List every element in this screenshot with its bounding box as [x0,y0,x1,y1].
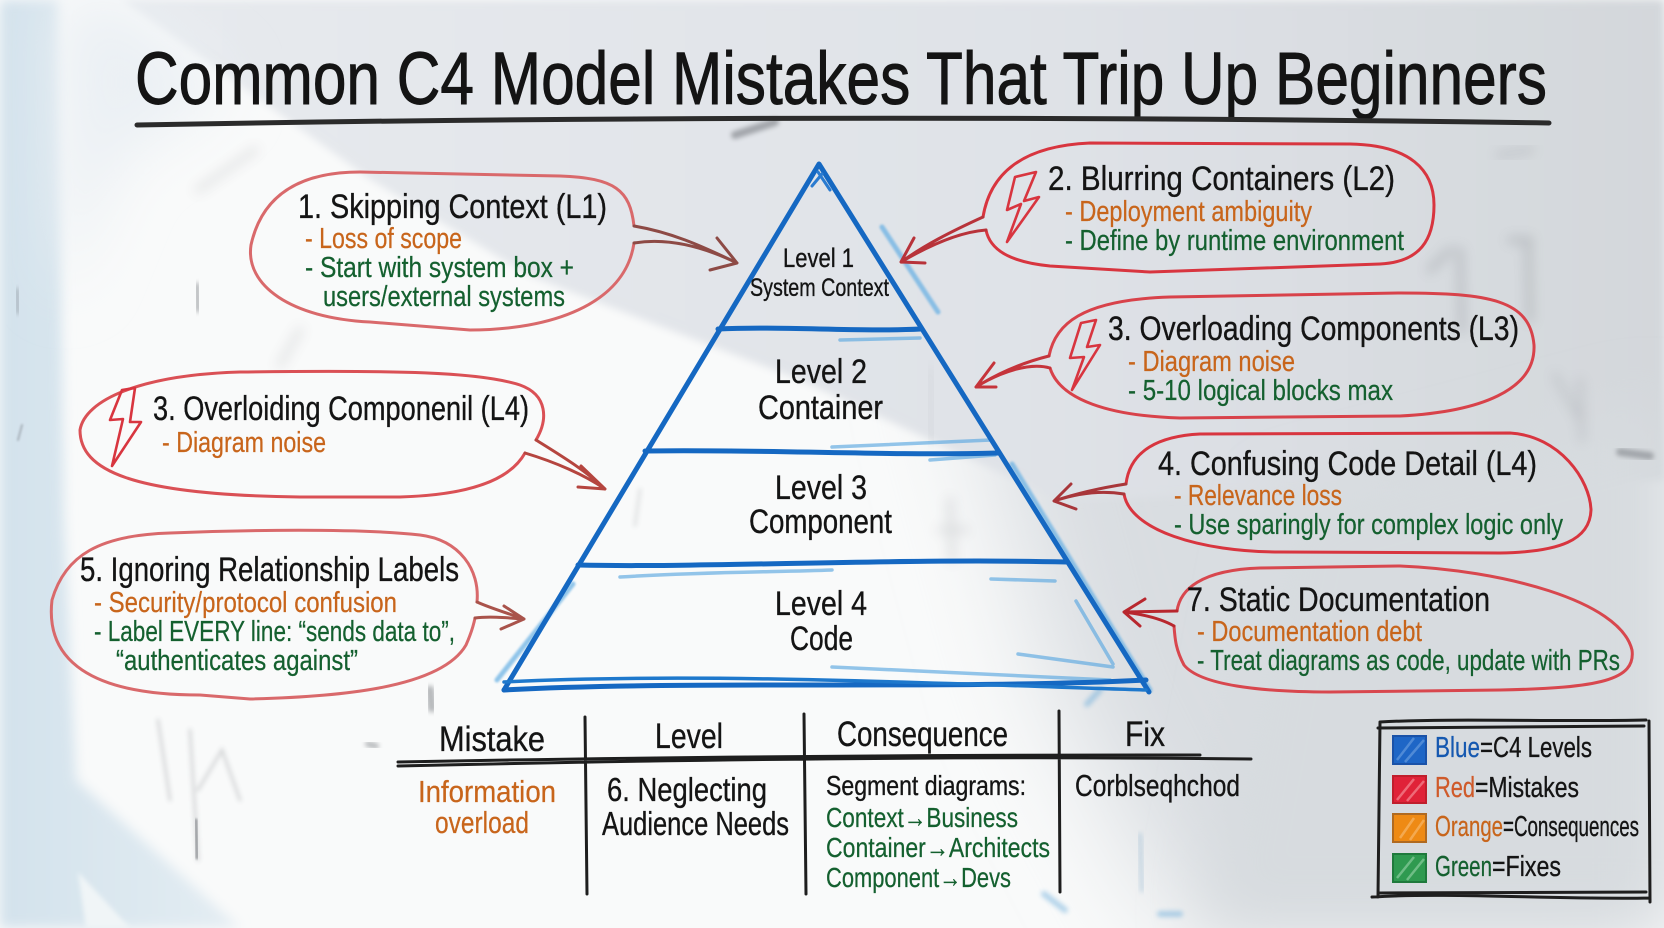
level 2 label [758,353,883,427]
table cell: consequence column: Container→Architects [826,832,1050,863]
table header [439,715,1165,759]
callout 5: ignoring relationship labels: - Security/protocol confusion [94,587,397,619]
callout 3: overloading components L3: - 5-10 logical blocks max [1128,375,1393,407]
pyramid of C4 levels [497,164,1150,692]
level 1 label [750,243,889,302]
callout 2: blurring containers: - Define by runtime environment [1065,225,1404,257]
callout 4: confusing code detail: - Use sparingly for complex logic only [1174,509,1563,541]
callout 1: skipping context: users/external systems [323,281,565,313]
callout 4: confusing code detail: - Relevance loss [1174,480,1342,512]
legend: red: =Mistakes [1475,772,1579,804]
table cell: mistake column: overload [435,805,529,840]
callout 4: confusing code detail [1054,433,1591,553]
icon: lightning bolt [110,388,141,466]
level 4 label: Level 4 [775,585,867,623]
legend: green: Green [1435,851,1492,883]
legend: green: =Fixes [1492,851,1561,883]
callout 1: skipping context: - Start with system box + [305,252,574,284]
legend: orange [1393,811,1639,843]
legend: blue: =C4 Levels [1480,732,1592,764]
level 3 label [749,469,892,541]
callout 5: ignoring relationship labels: - Label EVERY line: “sends data to”, [94,616,455,648]
callout 7: static documentation: 7. Static Documentation [1187,581,1490,619]
table cell: fix column: Corblseqhchod [1075,768,1240,803]
legend: blue: Blue [1435,732,1480,764]
table header: Consequence [837,715,1008,754]
callout 5: ignoring relationship labels: “authenticates against” [116,645,358,677]
callout 2: blurring containers: - Deployment ambiguity [1065,196,1312,228]
table header: Fix [1125,715,1165,754]
level 1 label: System Context [750,274,889,302]
callout 3: overloading component L4 [80,371,605,497]
callout 3: overloading components L3: 3. Overloading Components (L3) [1108,310,1519,348]
title underline [137,118,1549,125]
icon: lightning bolt [1007,172,1039,242]
callout 2: blurring containers [901,143,1434,272]
table cell: mistake column: Information [418,774,556,809]
legend: green [1393,851,1561,883]
table cell: consequence column: Segment diagrams: [826,770,1026,801]
callout 2: blurring containers: 2. Blurring Containers (L2) [1048,160,1395,198]
table header: Mistake [439,720,545,759]
level 2 label: Level 2 [775,353,867,391]
callout 3: overloading components L3 [976,293,1534,418]
level 3 label: Level 3 [775,469,867,507]
legend: red [1393,772,1579,804]
callout 1: skipping context: 1. Skipping Context (L1) [298,188,607,226]
level 2 label: Container [758,389,883,427]
legend [1372,720,1650,902]
callout 5: ignoring relationship labels: 5. Ignoring Relationship Labels [80,551,459,589]
table cell: level column: Audience Needs [602,805,789,842]
level 4 label [775,585,867,658]
callout 3: overloading components L3: - Diagram noise [1128,346,1295,378]
callout 4: confusing code detail: 4. Confusing Code Detail (L4) [1158,445,1537,483]
callout 3: overloading component L4: - Diagram noise [162,427,326,459]
callout 1: skipping context: - Loss of scope [305,223,462,255]
legend: blue [1393,732,1592,764]
callout 7: static documentation [1124,566,1632,692]
callout 1: skipping context [250,172,737,330]
callout 5: ignoring relationship labels [51,530,524,699]
callout 7: static documentation: - Documentation debt [1197,616,1422,648]
table cell: consequence column: Component→Devs [826,862,1011,893]
table header: Level [655,717,723,756]
icon: lightning bolt [1070,320,1100,390]
table cell: consequence column: Context→Business [826,802,1018,833]
table cell: mistake column [418,774,556,840]
mistakes table [398,711,1251,894]
table cell: consequence column [826,770,1050,893]
legend: red: Red [1435,772,1475,804]
level 4 label: Code [790,620,853,658]
legend: orange: Orange [1435,811,1503,843]
level 3 label: Component [749,503,892,541]
table cell: level column: 6. Neglecting [607,771,767,808]
level 1 label: Level 1 [783,243,854,273]
callout 3: overloading component L4: 3. Overloiding Componenil (L4) [153,390,529,428]
table cell: level column [602,771,789,842]
